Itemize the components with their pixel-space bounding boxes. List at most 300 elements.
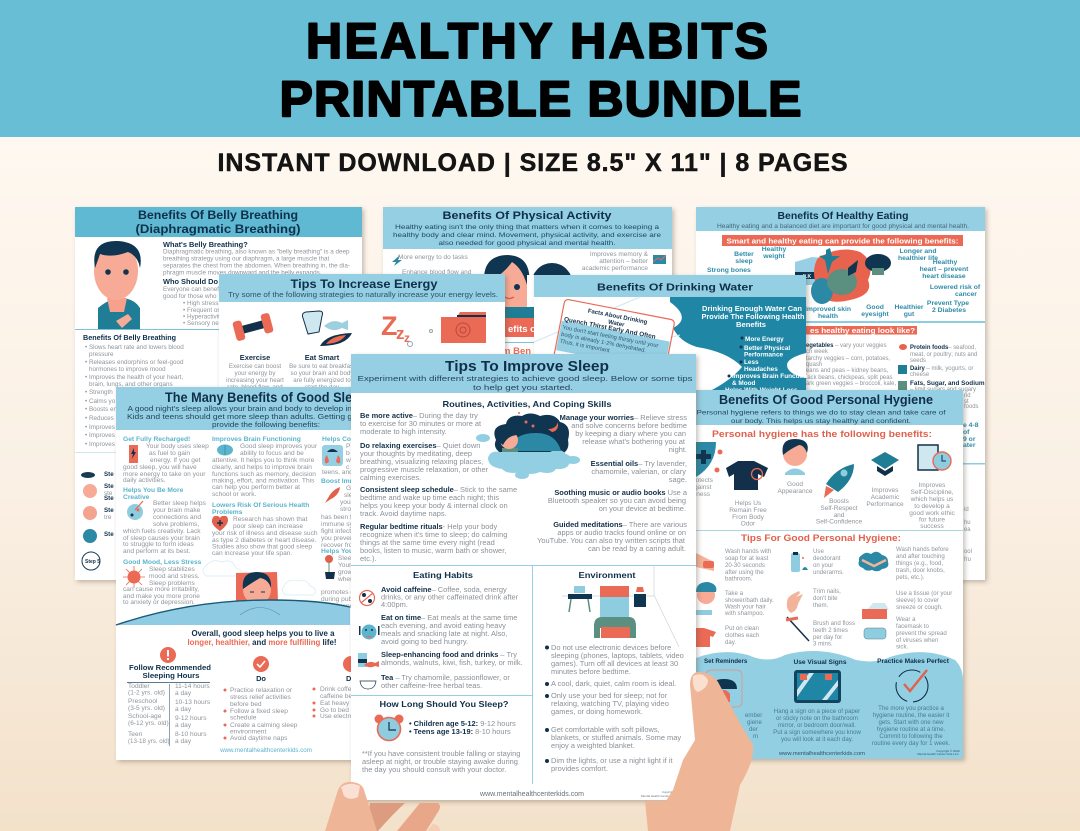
facts card	[552, 299, 675, 389]
practice makes perfect: Practice Makes Perfect	[877, 658, 950, 665]
do list: environment	[230, 728, 266, 736]
energy tip: eat smart: Be sure to eat breakfast	[289, 363, 355, 370]
food groups list: 9 or	[963, 436, 976, 443]
sleeping hours table: Sleeping Hours	[142, 671, 200, 680]
activity intro	[393, 224, 661, 247]
activity benefit labels: attention – better	[599, 258, 649, 265]
hygiene tips column 1: soap for at least	[725, 555, 769, 562]
food groups list: nd	[964, 393, 971, 399]
benefits of belly breathing list: pressure	[89, 351, 114, 358]
benefit: mood: can cause more irritability,	[123, 586, 199, 593]
icon: child sleeping on cloud	[476, 412, 580, 479]
water teal panel	[670, 297, 806, 400]
benefit: brain: can help you perform better at	[212, 484, 300, 491]
water benefits text: Provide The Following Health	[702, 312, 805, 321]
benefit: body odor	[726, 461, 768, 528]
environment column: Environment	[578, 570, 636, 580]
benefit: brain: attentive. It helps you to think more	[212, 457, 315, 464]
hygiene tips column 3	[858, 546, 952, 650]
benefits of belly breathing list: • Boosts en	[85, 406, 117, 413]
copyright: Mental Health Center Kids LLC	[917, 752, 960, 756]
food groups list: Dairy – milk, yogurts, or	[910, 366, 973, 372]
don't list	[312, 656, 372, 720]
benefits of belly breathing list: Benefits Of Belly Breathing	[83, 333, 176, 342]
page: personal hygiene	[689, 390, 963, 759]
set reminders: ember	[745, 712, 762, 719]
vegetables list: egetables – vary your veggies	[806, 343, 887, 349]
benefit: mood: Sleep stabilizes	[149, 566, 196, 573]
benefit: serious health problems: your risk of illness and disease such	[212, 530, 318, 537]
benefit: recharged: as fuel to gain	[149, 450, 190, 457]
vegetables list: tarchy veggies – corn, potatoes,	[806, 356, 891, 362]
belly heading	[136, 210, 301, 236]
water benefits text: Drinking Enough Water Can	[702, 304, 802, 313]
environment column: minutes before bedtime.	[551, 667, 631, 676]
icon: alarm clock	[374, 714, 404, 740]
hygiene tips column 1: Wash hands with	[725, 548, 771, 555]
hygiene tips column 3: and after touching	[896, 553, 945, 560]
benefit: creative: solve problems,	[153, 521, 199, 528]
vegetables list: lack beans, chickpeas, split peas	[806, 375, 893, 381]
icons: breathing steps: tre	[104, 514, 112, 521]
facts card: Thus, it is important	[559, 339, 610, 354]
benefit: brain: Improves Brain Functioning	[212, 436, 301, 443]
don't list: Go to bed hungry	[320, 707, 372, 714]
sleeping hours table: Teen	[128, 731, 143, 738]
benefit: third column	[321, 436, 391, 610]
icon: bedroom	[568, 586, 646, 638]
eating habits column: meals and snacking late at night. Also,	[381, 629, 508, 638]
benefit: protects against illness: against	[691, 484, 712, 491]
eating benefit labels: 2 Diabetes	[932, 307, 966, 314]
hygiene tips column 1: Put on clean	[725, 625, 759, 632]
closing message	[188, 629, 336, 647]
routines left column: books, listen to music, warm bath or shower,	[360, 546, 506, 555]
benefit: brain: clearly, and helps to improve brain	[212, 464, 312, 471]
hygiene tips column 3: sneeze or cough.	[896, 604, 943, 611]
main sleep heading: Tips To Improve Sleep	[445, 358, 609, 375]
activity heading: Benefits Of Physical Activity	[442, 210, 612, 222]
activity benefit labels: Improves memory &	[590, 251, 649, 258]
benefits of belly breathing list: • Slows heart rate and lowers blood	[85, 344, 184, 351]
eating habits column	[358, 570, 523, 690]
eating habits column: 4:00pm.	[381, 600, 408, 609]
routines right column: by keeping a diary where you can	[575, 429, 686, 438]
activity benefit labels: academic performance	[582, 265, 648, 272]
food groups list: Protein foods– seafood,	[910, 345, 976, 351]
benefits of belly breathing list: • Releases endorphins or feel-good	[85, 359, 184, 366]
left hand fingers	[325, 782, 440, 831]
sleeping hours table: a day	[175, 722, 192, 729]
benefit: self-discipline: good work ethic	[909, 510, 956, 517]
energy tip: eat smart: Eat Smart	[305, 353, 340, 362]
what's belly breathing text: phragm muscle moves downward and the belly expands.	[163, 270, 322, 276]
benefits of belly breathing list: • Improves	[85, 424, 115, 431]
environment column	[545, 565, 684, 773]
icons: breathing steps: Ste	[104, 531, 114, 538]
eating benefit labels: Healthy	[762, 246, 786, 253]
routines left column: Regular bedtime rituals- Help your body	[360, 522, 498, 531]
benefit: creative: of sleep causes your brain	[123, 535, 200, 542]
benefit: academic performance: Academic	[871, 494, 900, 501]
routines right column: sage.	[669, 475, 687, 484]
hygiene heading: Benefits Of Good Personal Hygiene	[719, 393, 933, 407]
benefit: protects against illness: illness	[692, 491, 711, 498]
benefit: third column: Boost Immune	[321, 478, 368, 485]
benefit: recharged: good sleep, you will have	[123, 464, 197, 471]
don't list: caffeine before	[320, 693, 364, 700]
copyright	[917, 749, 960, 756]
icon: sleep letters: z	[396, 324, 404, 343]
page: good sleep benefits	[116, 387, 416, 760]
food groups list: st	[964, 399, 969, 405]
vegetables list: ch week	[806, 349, 828, 355]
benefit: recharged	[123, 436, 209, 484]
food groups list: meat, or poultry; nuts and	[910, 352, 977, 358]
eating benefit labels: Better	[734, 251, 754, 258]
benefit: creative: connections and	[153, 514, 201, 521]
routines left column	[360, 411, 517, 563]
facts card: Water	[607, 320, 625, 329]
hygiene tips column 2: Brush and floss	[813, 620, 855, 627]
set reminders: Set Reminders	[704, 658, 748, 665]
use visual signs: Hang a sign on a piece of paper	[774, 708, 860, 715]
main sleep website: www.mentalhealthcenterkids.com	[479, 791, 584, 798]
hygiene benefits heading: Personal hygiene has the following benefits:	[712, 429, 932, 440]
don't list: Drink coffee	[320, 686, 355, 693]
food groups list: – limit sugars and sugary	[910, 387, 976, 393]
icons: breathing steps: Ste	[104, 495, 114, 502]
routines right column	[537, 413, 688, 553]
practice makes perfect: gets. Start with one new	[878, 719, 944, 726]
sleeping hours table: a day	[175, 706, 192, 713]
sleep duration section: • Teens age 13-19: 8-10 hours	[409, 727, 511, 736]
routines right column: Guided meditations– There are various	[553, 520, 687, 529]
sleeping hours table: School-age	[128, 713, 162, 720]
food groups list: ool	[964, 549, 972, 555]
benefit: self-discipline: which helps us	[910, 496, 954, 503]
benefit: creative: which fuels creativity. Lack	[122, 528, 201, 535]
icon: healthy foods: ILK	[803, 274, 811, 280]
benefit: protects against illness	[689, 442, 722, 498]
sleep duration section: • Children age 5-12: 9-12 hours	[409, 719, 516, 728]
environment column: blankets, or stuffed animals. Some may	[551, 733, 681, 742]
eating habits column: Eat on time– Eat meals at the same time	[381, 613, 517, 622]
don't list: Don't	[346, 674, 365, 683]
benefit: mood: and make you more prone	[123, 593, 200, 600]
benefits of belly breathing list: • Reduces	[85, 415, 114, 422]
use visual signs: or sticky note on the bathroom	[776, 715, 858, 722]
routines left column: recognize when it's time to sleep; do calming	[360, 530, 507, 539]
hygiene tips column 2: teeth 2 times	[813, 627, 848, 634]
routines left column: moderate to high intensity.	[360, 427, 447, 436]
sleeping hours table: (3-5 yrs. old)	[128, 705, 165, 712]
water benefits text: Less	[744, 359, 759, 366]
sleeping hours table: (1-2 yrs. old)	[128, 690, 165, 696]
benefit: body odor: Odor	[741, 520, 756, 528]
sleeping hours table: (6-12 yrs. old)	[128, 720, 169, 727]
benefit: self-discipline: success	[920, 523, 944, 530]
what's belly breathing text: • Sensory needs	[183, 320, 229, 327]
eating habits column: Sleep-enhancing food and drinks – Try	[381, 650, 517, 659]
use visual signs: Use Visual Signs	[793, 659, 847, 666]
what's belly breathing text: • Hyperactivity	[183, 314, 224, 320]
icon: children heads	[484, 255, 573, 357]
facts card: Quench Thirst Early And Often	[563, 316, 656, 341]
use visual signs	[773, 659, 861, 743]
hygiene tips column 3: sleeve) to cover	[896, 597, 939, 604]
benefits of belly breathing list	[83, 333, 184, 448]
vegetables list: eans and peas – kidney beans,	[806, 368, 889, 374]
eating benefit labels: heart – prevent	[920, 266, 969, 273]
water heading: Benefits Of Drinking Water	[597, 282, 753, 294]
activity benefit labels: More energy to do tasks	[398, 254, 468, 261]
eating benefits banner: Smart and healthy eating can provide the following benefits:	[726, 236, 958, 246]
do list: schedule	[230, 714, 257, 722]
water benefits text: & Mood	[732, 380, 756, 387]
icon: tea cup	[360, 681, 376, 689]
benefit: third column: c	[346, 464, 350, 471]
benefit: creative: Better sleep helps	[153, 500, 206, 507]
sleeping hours table: Preschool	[128, 698, 158, 705]
routines left column: to exercise for 30 minutes or more at	[360, 419, 482, 428]
energy intro: Try some of the following strategies to naturally increase your energy levels.	[228, 292, 498, 299]
water benefits text: Headaches	[744, 366, 778, 373]
benefits of belly breathing list: brain, lungs, and other organs	[89, 381, 173, 388]
environment column: enjoy a weighted blanket.	[551, 741, 635, 750]
routines left column: bedtime and wake up time each night; this	[360, 493, 499, 502]
energy tip: eat smart: so your brain and body	[291, 370, 354, 377]
food groups list: ater	[963, 442, 976, 449]
benefit: self-discipline: for future	[919, 516, 945, 524]
main sleep copyright: Mental Health Center Kids	[641, 794, 677, 798]
sleep duration section: asleep at night, or trouble staying awake during	[362, 757, 518, 766]
benefits of belly breathing list: • Improves	[85, 432, 115, 439]
hygiene tips column 1: day.	[725, 639, 736, 646]
hygiene tips column 3: things (e.g., food,	[896, 560, 943, 567]
environment column: Get comfortable with soft pillows,	[551, 725, 660, 734]
benefit: mood: Good Mood, Less Stress	[123, 559, 202, 566]
food groups list: e 4-8	[963, 422, 979, 429]
energy tip: exercise: your energy by	[235, 370, 276, 377]
benefit: third column: stro	[340, 506, 351, 513]
eating benefit labels: Lowered risk of	[930, 284, 981, 291]
icon: boy breathing	[94, 241, 141, 329]
eating heading: Benefits Of Healthy Eating	[778, 211, 909, 222]
eating benefit labels: Strong bones	[707, 267, 751, 274]
sleeping hours table: 11-14 hours	[175, 683, 210, 690]
benefit: self-respect: Self-Confidence	[816, 518, 863, 526]
energy tip: exercise: Exercise can boost	[229, 363, 281, 370]
routines left column: helps you keep your body & internal clock on	[360, 501, 508, 510]
benefit: serious health problems: as type 2 diabetes or heart disease.	[212, 537, 317, 544]
routines heading: Routines, Activities, And Coping Skills	[442, 399, 612, 409]
set reminders: giene	[747, 719, 763, 726]
food groups list: seeds	[910, 358, 926, 364]
vegetables list: ark green veggies – broccoli, kale,	[806, 381, 896, 387]
practice makes perfect: hygiene routine, the easier it	[873, 712, 950, 719]
benefits of belly breathing list: • Calms yo	[85, 398, 116, 405]
benefit: mood	[123, 559, 202, 606]
eating benefit labels: eyesight	[861, 311, 890, 318]
benefit: third column: b	[346, 450, 350, 457]
icon: dumbbell	[232, 312, 274, 342]
use visual signs: you will look at it each day.	[781, 736, 853, 743]
eating benefit labels: Improved skin	[805, 306, 851, 313]
routines right column: and solve concerns before bedtime	[571, 421, 687, 430]
routines right column: night.	[669, 445, 687, 454]
eating benefit labels: gut	[904, 311, 915, 318]
hygiene tips column 2: deodorant	[813, 555, 841, 562]
food groups list: Fats, Sugar, and Sodium	[910, 380, 985, 387]
environment column: games, or doing homework.	[551, 707, 643, 716]
subtitle: INSTANT DOWNLOAD | SIZE 8.5" X 11" | 8 PAGES	[218, 149, 848, 177]
website: www.mentalhealthcenterkids.com	[219, 747, 312, 754]
benefit: third column: G	[346, 485, 351, 492]
energy heading: Tips To Increase Energy	[290, 277, 438, 291]
benefit: self-discipline: to develop a	[914, 503, 950, 510]
eating benefit labels: Good	[866, 304, 884, 311]
what's belly breathing text: Everyone can benefit	[163, 286, 222, 293]
main sleep copyright: Copyright	[662, 790, 674, 794]
do list: before bed	[230, 701, 262, 708]
header banner	[0, 0, 1080, 137]
eating benefit labels: Healthier	[894, 304, 924, 311]
sleep benefits intro	[127, 406, 405, 429]
blue strategies wave	[696, 651, 963, 759]
hygiene tips column 2: Use	[813, 548, 824, 555]
routines right column: chamomile, valerian, or clary	[591, 467, 686, 476]
eating habits column: Avoid caffeine– Coffee, soda, energy	[381, 585, 507, 594]
benefit: body odor: From Body	[732, 514, 765, 521]
main sleep copyright	[641, 790, 677, 798]
benefit: third column: promotes c	[321, 589, 354, 596]
what's belly breathing text: Diaphragmatic breathing, also known as "belly breathing" is a deep	[163, 248, 350, 256]
hygiene tips column 1: Wash your hair	[725, 604, 766, 610]
benefit: third column: you preven	[321, 535, 354, 542]
main sleep intro: to help get you started.	[473, 383, 573, 392]
do list: stress relief activities	[230, 694, 292, 701]
sleeping hours table: Follow Recommended	[129, 663, 212, 672]
water benefits text: Helps With Weight Loss	[725, 387, 798, 394]
sleeping hours table: (13-18 yrs. old)	[128, 738, 170, 745]
hygiene tips column 3: of viruses when	[896, 637, 938, 644]
icon: sleep letters: z	[404, 331, 410, 345]
benefit: good appearance	[777, 439, 813, 495]
benefit: brain: making, effort, and motivation. This	[212, 478, 315, 484]
water benefits text: Performance	[744, 352, 784, 358]
benefit: creative: to struggle to form ideas	[123, 541, 194, 548]
benefit: third column: Helps You	[321, 548, 353, 555]
food groups list: of	[963, 429, 970, 436]
hygiene tips column 2: on your	[813, 562, 833, 569]
routines right column: Manage your worries– Relieve stress	[560, 413, 687, 422]
benefit: third column: recover fro	[321, 542, 353, 549]
what's belly breathing text: good for those who	[163, 293, 217, 300]
sleeping hours table	[127, 647, 212, 746]
activity intro: also needed for good physical and mental health.	[438, 240, 616, 247]
food groups list: hu	[964, 520, 971, 526]
title: HEALTHY HABITS	[306, 13, 768, 69]
routines right column: Soothing music or audio books Use a	[554, 488, 688, 497]
benefit: self-respect	[816, 464, 863, 526]
benefit: recharged: Your body uses sleep	[146, 443, 209, 450]
don't list: Use electronics	[320, 713, 366, 720]
energy tip: eat smart	[289, 353, 355, 391]
what's belly breathing text	[163, 240, 350, 327]
what's belly breathing text: What's Belly Breathing?	[163, 240, 248, 249]
benefit: academic performance	[866, 452, 904, 508]
icon: sleeping child	[116, 561, 350, 625]
benefit: third column: Sleep	[338, 555, 355, 562]
benefit: creative: Creative	[123, 494, 150, 501]
practice makes perfect	[872, 658, 950, 747]
hygiene tips column 1: bathroom.	[725, 576, 753, 582]
environment column: Only use your bed for sleep; not for	[551, 691, 668, 700]
hygiene tips column 2: them.	[813, 602, 829, 609]
icon: bread and fish	[302, 311, 352, 346]
benefit: serious health problems: poor sleep can increase	[233, 523, 303, 530]
what's belly breathing text: breathing strategy using our diaphragm, a large muscle that	[163, 256, 330, 262]
sleeping hours table: 8-10 hours	[175, 731, 207, 738]
what's belly breathing text: separates the chest from the abdomen. When breathing in, the dia-	[163, 262, 350, 270]
set reminders: m	[753, 733, 758, 740]
activity intro: Healthy eating isn't the only thing that matters when it comes to keeping a	[395, 224, 659, 231]
hygiene tips column 2: per day for	[813, 634, 842, 641]
benefit: third column: P	[346, 443, 351, 450]
page: increase energy	[219, 274, 505, 534]
environment column: sleeping (phones, laptops, tablets, video	[551, 651, 684, 660]
vegetables list	[806, 343, 896, 387]
hygiene tips column 2: underarms.	[813, 569, 844, 576]
what's belly breathing text: Who Should Do It?	[163, 277, 230, 286]
belly heading: Benefits Of Belly Breathing	[138, 210, 298, 222]
do list: Follow a fixed sleep	[230, 708, 288, 715]
page: physical activity	[383, 207, 672, 587]
benefit: serious health problems: Research has shown that	[233, 516, 308, 523]
closing message: Overall, good sleep helps you to live a	[192, 629, 335, 638]
hygiene tips column 1: with shampoo.	[724, 610, 765, 617]
benefit: third column: Helps Control Weight	[322, 436, 391, 443]
benefit: third column: sle	[344, 492, 353, 499]
benefit: third column: teens, and	[322, 469, 353, 476]
hygiene tips column 1: clothes each	[725, 632, 759, 639]
sleep duration section	[362, 699, 520, 774]
routines left column: things at the same time every night (read	[360, 538, 495, 547]
hygiene intro	[696, 410, 946, 425]
set reminders: der	[749, 726, 758, 733]
benefit: third column: your	[340, 499, 354, 506]
eating benefit labels: Healthy	[933, 259, 957, 266]
sleeping hours table: 10-13 hours	[175, 699, 211, 706]
benefit: third column: Your	[338, 562, 352, 569]
routines left column: etc.).	[360, 554, 377, 563]
benefit: serious health problems: Studies also show that good sleep	[212, 544, 312, 550]
environment column: relaxing, watching TV, playing video	[551, 699, 669, 708]
routines left column: your thoughts by meditating, deep	[360, 449, 472, 458]
water benefits text: Benefits	[736, 320, 766, 329]
water benefits text: Better Physical	[744, 345, 790, 352]
icons: breathing steps: Ste	[104, 471, 114, 478]
icon: healthy foods	[795, 248, 891, 304]
title: PRINTABLE BUNDLE	[280, 71, 802, 127]
what's belly breathing text: • Frequent or	[183, 307, 220, 314]
routines right column: Essential oils– Try lavender,	[591, 459, 687, 468]
environment column: games). Turn off all devices at least 30	[551, 659, 678, 668]
benefit: recharged: daily activities.	[123, 477, 166, 484]
benefits of belly breathing list: hormones to improve mood	[89, 366, 166, 373]
main sleep intro: Experiment with different strategies to achieve good sleep. Below or some tips	[358, 374, 693, 383]
